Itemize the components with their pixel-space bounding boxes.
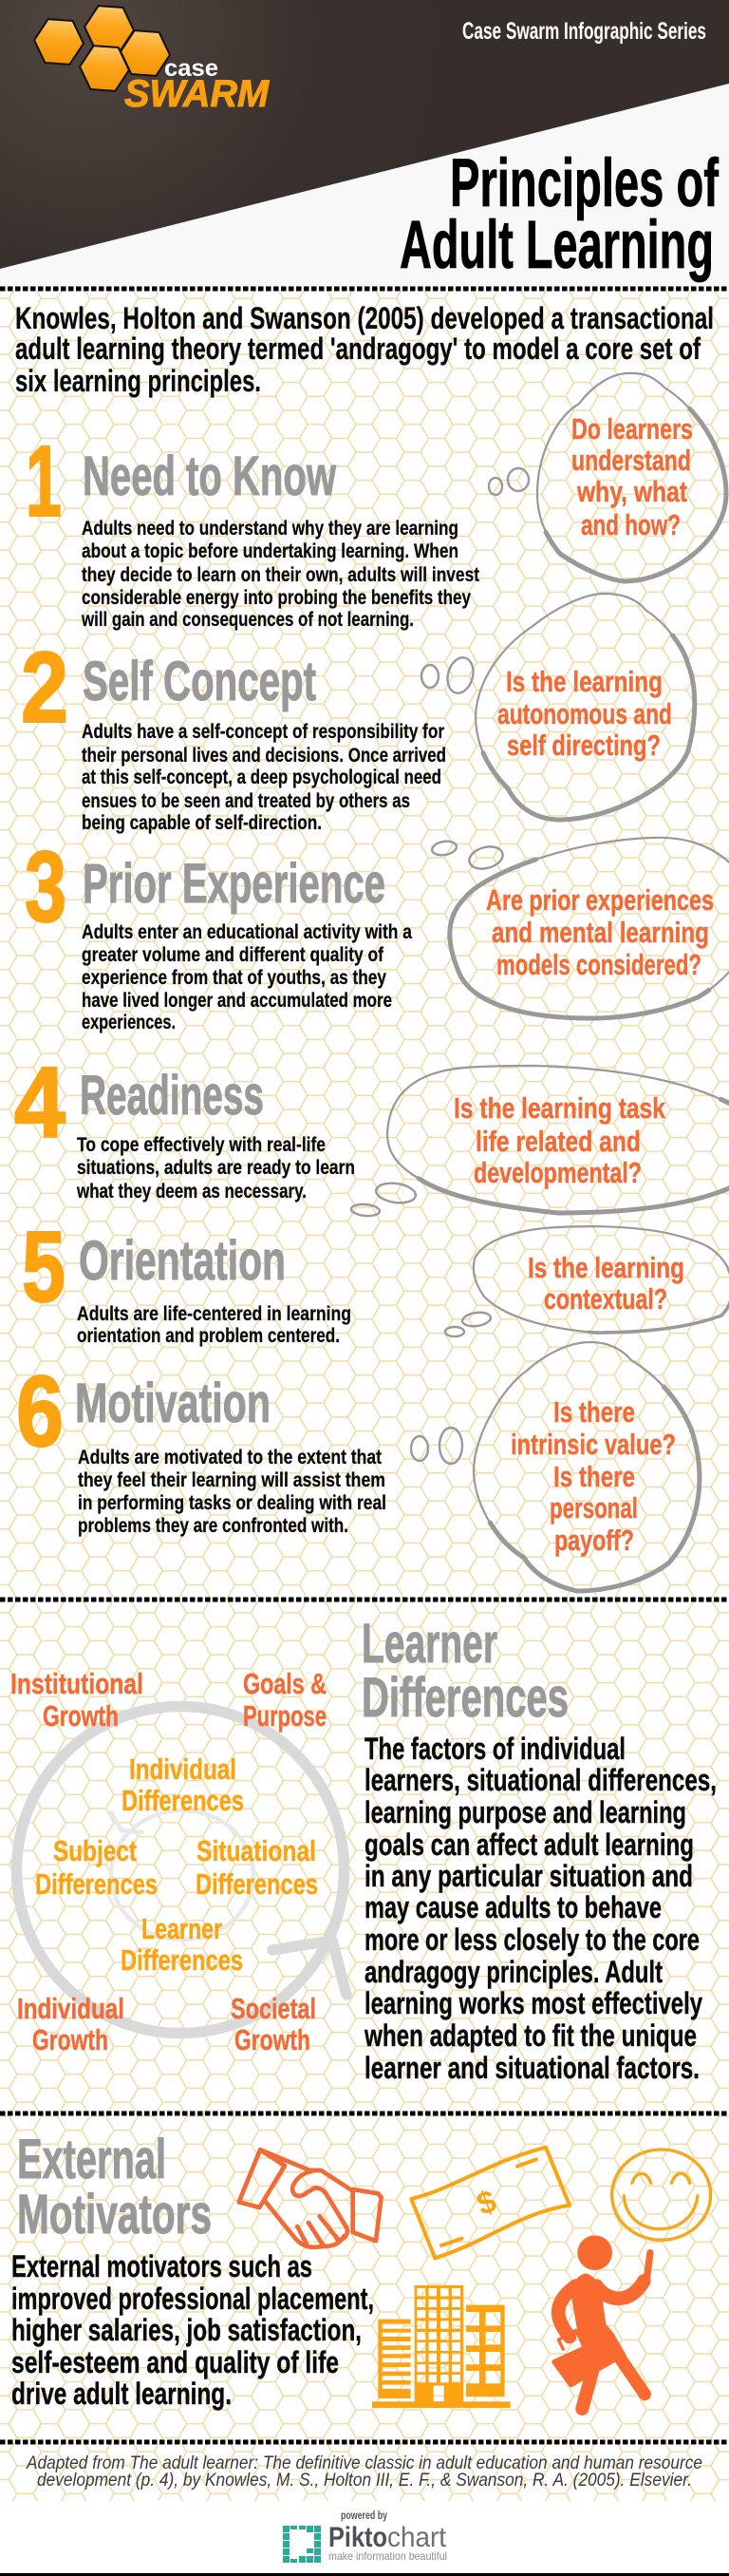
- inner labels: Differences: [122, 1784, 244, 1817]
- outer labels: Growth: [234, 2023, 310, 2056]
- outer labels: Societal: [231, 1992, 316, 2025]
- principle 5: orientation: Orientation: [79, 1230, 286, 1292]
- thought bubble 2: autonomous and: [497, 697, 672, 730]
- logo: case swarm: [32, 5, 271, 115]
- principle 4: readiness: Readiness: [80, 1065, 264, 1127]
- text: external motivators body: [11, 2249, 374, 2411]
- inner labels: Situational: [196, 1834, 316, 1867]
- text: external motivators body: improved professional placement,: [11, 2282, 374, 2316]
- powered by piktochart: make information beautiful: [328, 2549, 447, 2563]
- powered by piktochart: powered by: [341, 2509, 387, 2522]
- intro text: [15, 301, 714, 398]
- principle 5: orientation: 5: [22, 1211, 65, 1323]
- principle 1: need to know: about a topic before undertaking learning. When: [82, 540, 458, 562]
- thought bubble 6: payoff?: [554, 1524, 634, 1557]
- principle 3: prior experience: [25, 831, 413, 1033]
- principle 4: readiness: situations, adults are ready to learn: [77, 1156, 355, 1179]
- principle 2: self concept: Adults have a self-concept of responsibility for: [82, 720, 445, 743]
- principle 1: need to know: Adults need to understand why they are learning: [82, 517, 458, 540]
- principle 3: prior experience: have lived longer and accumulated more: [82, 989, 392, 1012]
- diagram: learner differences cycle: [10, 1667, 346, 2056]
- inner labels: Learner: [141, 1912, 222, 1945]
- thought bubble 2: self directing?: [507, 729, 661, 762]
- principle 3: prior experience: experiences.: [82, 1011, 176, 1033]
- principle 4: readiness: To cope effectively with real-life: [77, 1133, 326, 1156]
- icon: dollar bill: [411, 2148, 570, 2258]
- inner labels: [35, 1752, 318, 1977]
- thought bubble 5: contextual?: [544, 1282, 667, 1316]
- thought bubble 4: [351, 1066, 729, 1217]
- principle 3: prior experience: greater volume and different quality of: [82, 943, 384, 966]
- text: external motivators body: External motivators such as: [11, 2249, 312, 2283]
- thought bubble 4: Is the learning task: [454, 1091, 666, 1125]
- principle 6: motivation: problems they are confronted with.: [78, 1514, 348, 1537]
- principle 3: prior experience: 3: [25, 831, 66, 943]
- logo: case swarm: SWARM: [124, 73, 271, 115]
- icon: dollar bill: $: [473, 2184, 501, 2223]
- principle 4: readiness: [14, 1047, 355, 1203]
- principle 6: motivation: [16, 1355, 386, 1537]
- icon: handshake: [239, 2150, 382, 2247]
- principle 2: self concept: [21, 632, 446, 834]
- principle 1: need to know: considerable energy into probing the benefits they: [82, 586, 471, 609]
- outer labels: Growth: [32, 2023, 108, 2056]
- outer labels: Individual: [17, 1992, 124, 2025]
- principle 2: self concept: Self Concept: [83, 651, 316, 712]
- outer cycle ring with arrow: [17, 1706, 346, 2033]
- text: external motivators body: higher salaries, job satisfaction,: [11, 2313, 362, 2347]
- thought bubble 6: Is there: [553, 1395, 635, 1429]
- heading: learner differences: [362, 1613, 569, 1729]
- principle 2: self concept: being capable of self-direction.: [82, 811, 322, 834]
- thought bubble 4: developmental?: [474, 1156, 642, 1189]
- heading: learner differences: Learner: [362, 1613, 497, 1675]
- thought bubble 1: why, what: [576, 475, 687, 508]
- thought bubble 6: intrinsic value?: [511, 1428, 676, 1461]
- title: [400, 146, 719, 283]
- principle 5: orientation: orientation and problem centered.: [77, 1324, 340, 1347]
- icon: piktochart logo: [283, 2526, 321, 2563]
- inner labels: Differences: [196, 1867, 318, 1901]
- powered by piktochart: Pikto: [328, 2522, 387, 2553]
- inner labels: Subject: [53, 1834, 137, 1867]
- logo: case swarm: case: [164, 55, 218, 82]
- principle 2: self concept: their personal lives and decisions. Once arrived: [82, 744, 446, 767]
- thought bubble 1: understand: [571, 444, 691, 477]
- powered by piktochart: [283, 2509, 447, 2563]
- inner cycle ring with arrow: [111, 1810, 253, 1940]
- principle 6: motivation: in performing tasks or dealing with real: [78, 1491, 386, 1514]
- heading: external motivators: Motivators: [17, 2184, 212, 2245]
- principle 6: motivation: Adults are motivated to the extent that: [78, 1446, 382, 1468]
- outer labels: Purpose: [243, 1699, 327, 1733]
- thought bubble 5: [445, 1226, 729, 1336]
- principle 1: need to know: [26, 426, 479, 631]
- powered by piktochart: chart: [387, 2522, 447, 2553]
- principle 6: motivation: they feel their learning will assist them: [78, 1468, 385, 1491]
- principle 5: orientation: [22, 1211, 351, 1347]
- thought bubble 1: [489, 373, 726, 581]
- citation: [26, 2453, 702, 2491]
- principle 3: prior experience: Adults enter an educational activity with a: [82, 920, 413, 943]
- principle 2: self concept: 2: [21, 632, 68, 744]
- principle 2: self concept: ensues to be seen and treated by others as: [82, 789, 410, 812]
- thought bubble 3: [431, 838, 729, 1018]
- text: learner differences body: The factors of individual: [364, 1732, 626, 1766]
- icon: smiley face: [612, 2150, 711, 2240]
- principle 3: prior experience: Prior Experience: [83, 853, 385, 915]
- principle 1: need to know: 1: [26, 426, 62, 538]
- principle 4: readiness: 4: [14, 1047, 65, 1159]
- heading: external motivators: [17, 2129, 212, 2245]
- text: external motivators body: drive adult learning.: [11, 2377, 232, 2411]
- inner labels: Individual: [129, 1752, 236, 1786]
- outer labels: Institutional: [10, 1667, 143, 1700]
- header banner: [0, 0, 729, 269]
- inner labels: Differences: [35, 1867, 158, 1901]
- icon: person with briefcase: [554, 2235, 650, 2409]
- thought bubble 6: [411, 1342, 700, 1591]
- heading: external motivators: External: [17, 2129, 166, 2190]
- thought bubble 6: Is there: [553, 1460, 635, 1493]
- principle 4: readiness: what they deem as necessary.: [76, 1180, 307, 1203]
- outer labels: [10, 1667, 327, 2056]
- text: learner differences body: [364, 1732, 717, 2085]
- thought bubble 4: life related and: [476, 1125, 641, 1158]
- principle 1: need to know: will gain and consequences of not learning.: [81, 608, 414, 631]
- inner labels: Differences: [121, 1943, 243, 1977]
- principle 6: motivation: 6: [16, 1355, 64, 1468]
- thought bubble 1: and how?: [581, 508, 681, 541]
- principle 6: motivation: Motivation: [75, 1373, 271, 1434]
- heading: learner differences: Differences: [362, 1667, 569, 1729]
- thought bubble 6: personal: [550, 1491, 638, 1525]
- thought bubble 5: Is the learning: [528, 1251, 684, 1284]
- principle 1: need to know: Need to Know: [83, 445, 337, 507]
- principle 5: orientation: Adults are life-centered in learning: [77, 1302, 351, 1325]
- thought bubble 1: Do learners: [571, 412, 693, 445]
- principle 3: prior experience: experience from that of youths, as they: [82, 966, 386, 989]
- outer labels: Goals &: [243, 1667, 327, 1700]
- text: external motivators body: self-esteem and quality of life: [11, 2345, 339, 2379]
- outer labels: Growth: [43, 1699, 119, 1733]
- thought bubble 2: Is the learning: [506, 665, 663, 698]
- principle 2: self concept: at this self-concept, a deep psychological need: [82, 766, 441, 788]
- icon: office buildings: [372, 2285, 511, 2408]
- thought bubble 2: [421, 594, 695, 820]
- principle 1: need to know: they decide to learn on their own, adults will invest: [82, 563, 479, 586]
- intro text: six learning principles.: [15, 364, 261, 398]
